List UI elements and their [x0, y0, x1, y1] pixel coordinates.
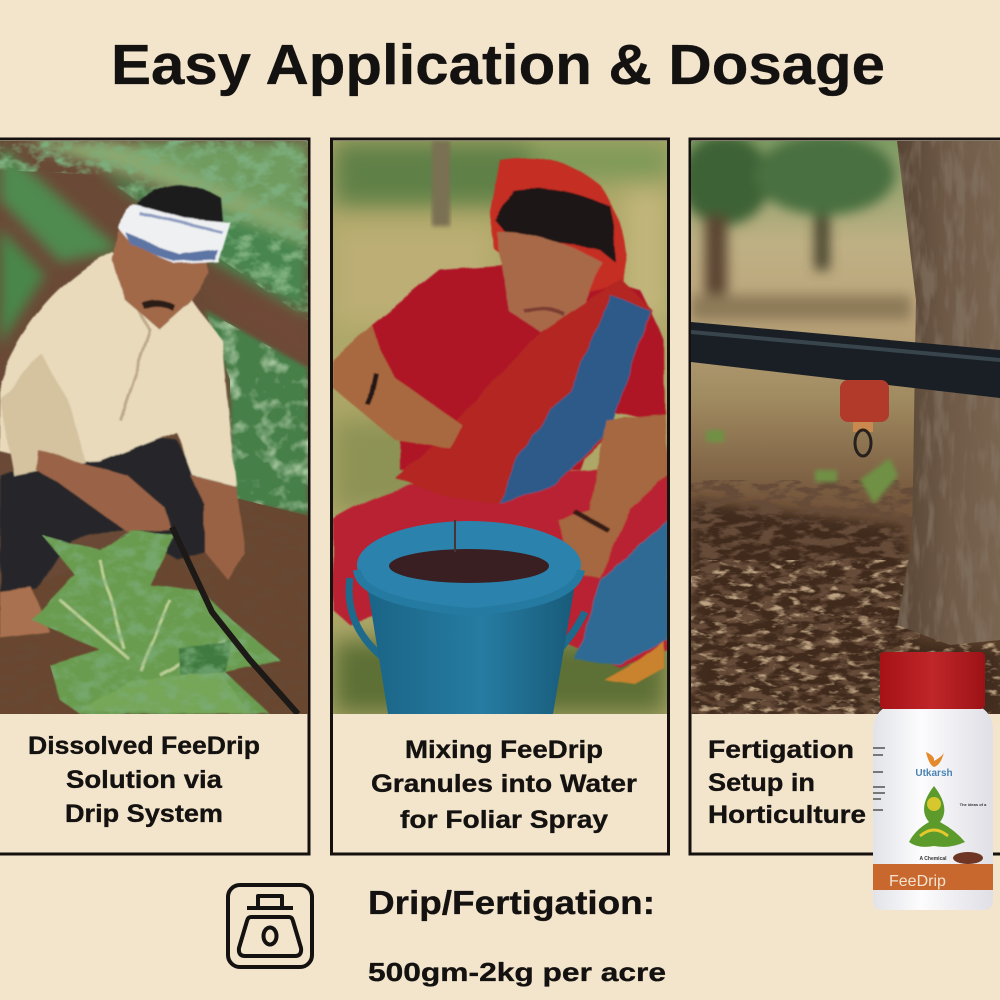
title: Easy Application & Dosage: [111, 33, 885, 97]
caption: [28, 732, 260, 828]
brand: Utkarsh: [915, 768, 953, 779]
tagline: The ideas of a: [960, 802, 987, 807]
caption: Fertigation: [708, 736, 854, 764]
product note: A Chemical: [919, 856, 947, 862]
caption: Horticulture: [708, 801, 866, 829]
side label lines: [873, 748, 885, 810]
label band: FeeDrip: [889, 873, 946, 890]
bottle body: [873, 708, 993, 910]
dosage heading: Drip/Fertigation:: [368, 884, 655, 921]
icon: weighing scale: [228, 885, 312, 967]
drip pipe: [691, 322, 1000, 398]
panel: foliar spray mixing: [332, 139, 670, 854]
panel: drip system: [0, 139, 309, 854]
drip tube: [172, 527, 298, 714]
panel frame: [332, 139, 668, 854]
farmer: [0, 185, 246, 638]
caption: [371, 736, 637, 834]
caption: Dissolved FeeDrip: [28, 732, 260, 760]
caption: Setup in: [708, 769, 815, 797]
photo: drip emitter by tree: [680, 135, 1000, 714]
yoga figure logo: [909, 786, 965, 847]
caption: Drip System: [65, 800, 223, 828]
panel frame: [0, 139, 309, 854]
caption: for Foliar Spray: [400, 806, 608, 834]
dosage amount: 500gm-2kg per acre: [368, 957, 666, 987]
label band: [873, 852, 993, 890]
bucket: [349, 520, 585, 714]
panel: fertigation setup: [680, 135, 1000, 854]
caption: Granules into Water: [371, 770, 637, 798]
emitter: [840, 380, 889, 456]
caption: [708, 736, 866, 829]
woman: [333, 158, 668, 684]
panel frame: [690, 139, 1000, 854]
brand: [915, 752, 953, 779]
product bottle: [873, 652, 993, 910]
caption: Solution via: [66, 766, 223, 794]
plant: [32, 530, 280, 714]
photo: woman mixing granules: [333, 141, 670, 714]
caption: Mixing FeeDrip: [405, 736, 603, 764]
bottle cap: [880, 652, 985, 709]
photo: farmer laying drip line: [0, 141, 308, 714]
